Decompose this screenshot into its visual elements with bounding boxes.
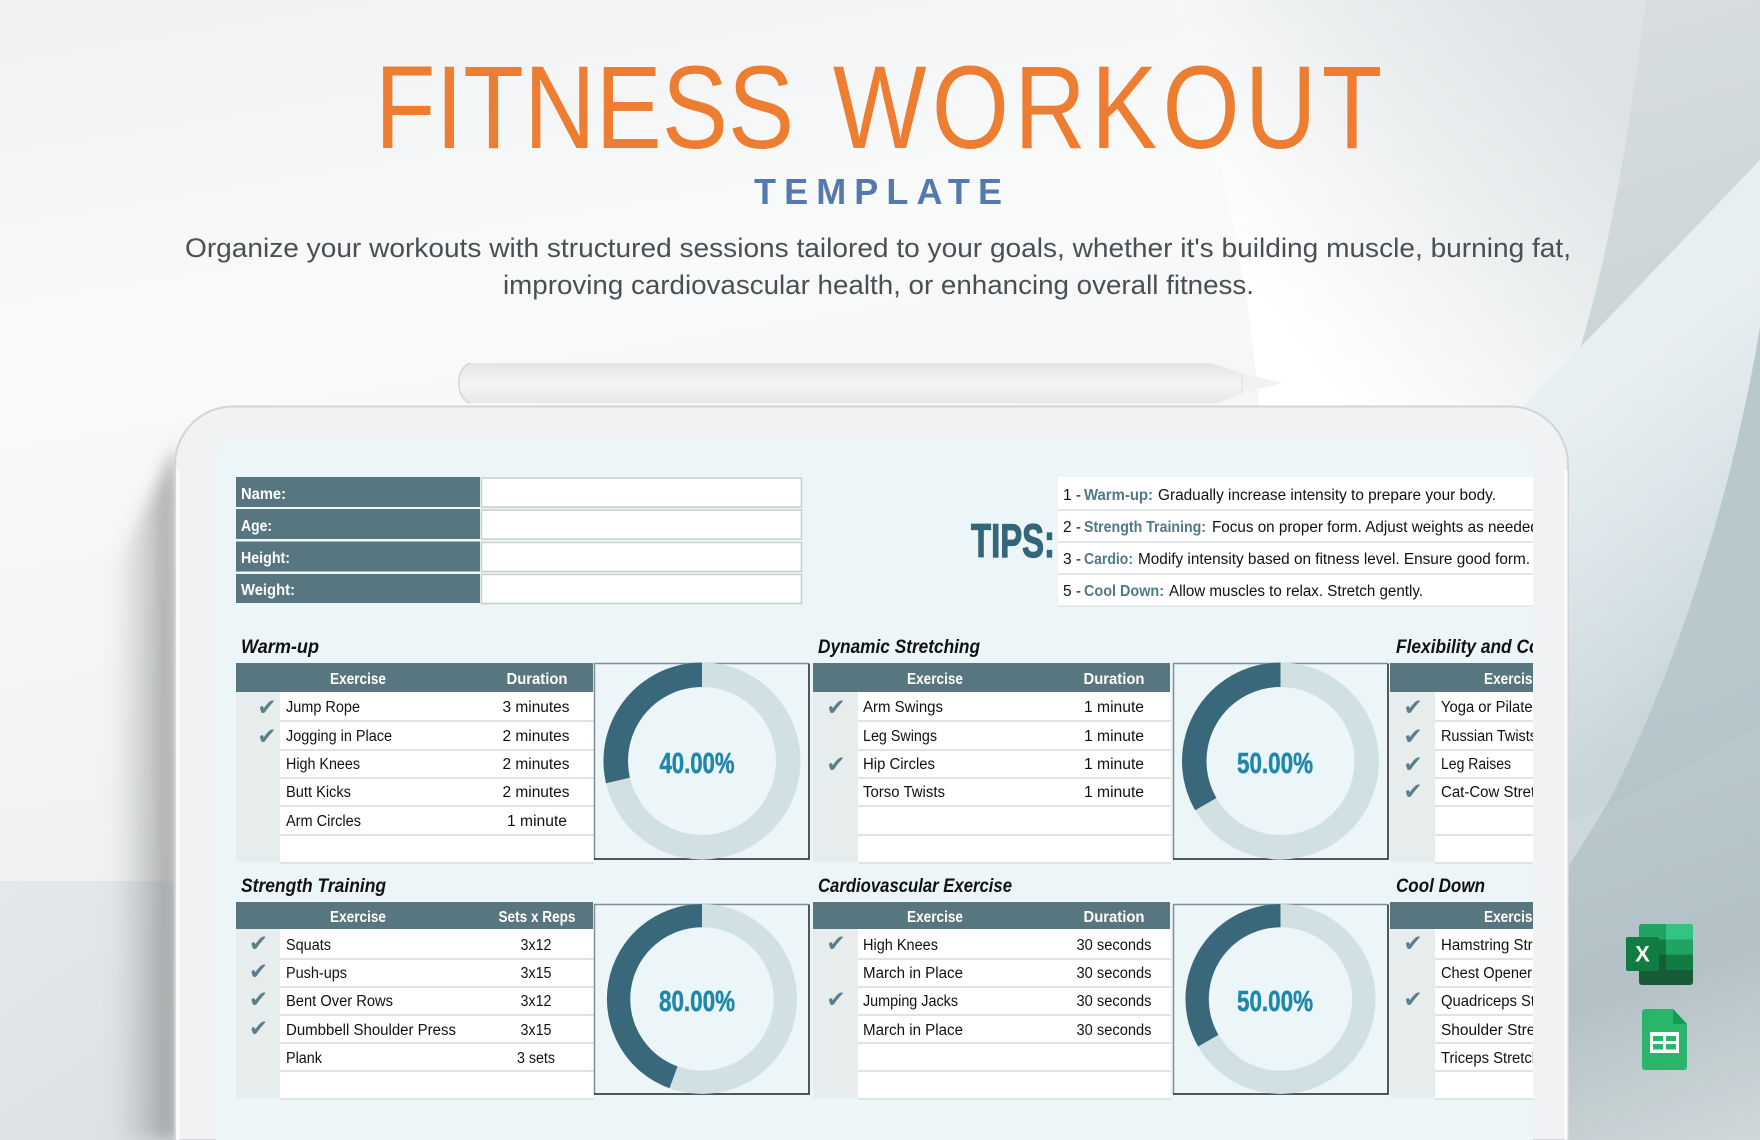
table: ✔ <box>826 987 846 1013</box>
table: Plank <box>286 1050 322 1067</box>
table: Jumping Jacks <box>863 993 958 1010</box>
panel: flexibility and core <box>1390 639 1533 864</box>
tips list: Gradually increase intensity to prepare your body. <box>1158 487 1496 504</box>
tips list: 5 - <box>1063 583 1081 600</box>
tips list: Strength Training: <box>1084 519 1206 536</box>
table: Arm Circles <box>286 813 361 830</box>
table: ✔ <box>249 959 268 985</box>
heading: Flexibility and Core <box>1396 637 1556 658</box>
table: 3x12 <box>520 993 552 1010</box>
table: Duration <box>506 671 568 688</box>
table: Yoga or Pilates <box>1441 699 1540 716</box>
table: 3x15 <box>520 1022 552 1039</box>
table: Exercise <box>330 671 386 688</box>
personal info form <box>236 477 802 604</box>
table: Exercise <box>907 671 963 688</box>
table: 1 minute <box>1084 728 1144 745</box>
table: ✔ <box>1403 695 1423 721</box>
table: 1 minute <box>1084 784 1144 801</box>
table: 1 minute <box>1084 756 1144 773</box>
table: 30 seconds <box>1076 965 1152 982</box>
table: Arm Swings <box>863 699 943 716</box>
table: 3x15 <box>520 965 552 982</box>
donut chart 80%: 80.00% <box>659 986 735 1018</box>
table: ✔ <box>249 1016 268 1042</box>
table: Hip Circles <box>863 756 935 773</box>
heading: Warm-up <box>241 637 319 658</box>
tips heading: TIPS: <box>971 514 1055 567</box>
personal info form: Name: <box>241 486 286 503</box>
table: March in Place <box>863 965 963 982</box>
tips list <box>1058 477 1543 606</box>
table: High Knees <box>863 937 938 954</box>
donut chart 50%: 50.00% <box>1237 748 1313 780</box>
panel: cool down <box>1390 878 1533 1100</box>
table: Duration <box>1084 671 1144 688</box>
title <box>375 42 1382 174</box>
table: 3 sets <box>517 1050 555 1067</box>
stylus pen <box>459 363 1282 403</box>
table: Bent Over Rows <box>286 993 393 1010</box>
table: Exercise <box>907 909 963 926</box>
spreadsheet content <box>236 477 1568 1099</box>
tablet screen <box>216 440 1533 1140</box>
panel: dynamic stretching <box>813 637 1388 863</box>
icon: excel: X <box>1635 942 1650 966</box>
personal info form: Age: <box>241 518 272 535</box>
table: Exercise <box>330 909 386 926</box>
icon: excel <box>1626 924 1693 985</box>
table: Triceps Stretch <box>1441 1050 1540 1067</box>
table: 30 seconds <box>1076 937 1152 954</box>
table: ✔ <box>257 695 277 721</box>
donut chart 50% <box>1173 904 1388 1094</box>
icon: google sheets <box>1642 1009 1687 1070</box>
personal info form: Height: <box>241 550 290 567</box>
title: FITNESS <box>375 42 794 174</box>
table: Leg Swings <box>863 728 937 745</box>
table: ✔ <box>1403 724 1423 750</box>
tips list: 3 - <box>1063 551 1081 568</box>
table: ✔ <box>249 931 268 957</box>
tips list: Cool Down: <box>1084 583 1164 600</box>
tips list: 1 - <box>1063 487 1081 504</box>
subtitle: template: TEMPLATE <box>754 171 1002 212</box>
heading: Strength Training <box>241 876 386 897</box>
tips list: 2 - <box>1063 519 1081 536</box>
table: Chest Opener <box>1441 965 1532 982</box>
tips list: Warm-up: <box>1084 487 1153 504</box>
table: Russian Twists <box>1441 728 1537 745</box>
table: Exercise <box>1484 909 1540 926</box>
table: 2 minutes <box>502 728 570 745</box>
table: Push-ups <box>286 965 347 982</box>
table: ✔ <box>1403 752 1423 778</box>
tips list: Focus on proper form. Adjust weights as needed. <box>1212 519 1543 536</box>
table: Dumbbell Shoulder Press <box>286 1022 456 1039</box>
table: 30 seconds <box>1076 993 1152 1010</box>
table: 30 seconds <box>1076 1022 1152 1039</box>
table: Jogging in Place <box>286 728 392 745</box>
description text <box>185 233 1571 300</box>
donut chart 50% <box>1173 662 1388 859</box>
heading: Dynamic Stretching <box>818 637 980 658</box>
table: 3 minutes <box>502 699 570 716</box>
table: Leg Raises <box>1441 756 1511 773</box>
table: ✔ <box>826 695 846 721</box>
table: Exercise <box>1484 671 1540 688</box>
donut chart 80% <box>594 904 809 1094</box>
table: 2 minutes <box>502 784 570 801</box>
table <box>813 663 1171 863</box>
table <box>236 663 594 863</box>
table: Shoulder Stretch <box>1441 1022 1556 1039</box>
table: Cat-Cow Stretch <box>1441 784 1551 801</box>
table: 3x12 <box>520 937 552 954</box>
table: High Knees <box>286 756 360 773</box>
table: Sets x Reps <box>498 909 576 926</box>
table <box>236 902 594 1099</box>
table: ✔ <box>826 752 846 778</box>
table: ✔ <box>1403 779 1423 805</box>
table: 2 minutes <box>502 756 570 773</box>
table <box>1390 663 1533 864</box>
table: Quadriceps Stretch <box>1441 993 1568 1010</box>
tips list: Allow muscles to relax. Stretch gently. <box>1169 583 1423 600</box>
title: WORKOUT <box>833 42 1382 174</box>
heading: Cool Down <box>1396 876 1485 897</box>
heading: Cardiovascular Exercise <box>818 876 1012 897</box>
table: ✔ <box>1403 931 1423 957</box>
tips list: Modify intensity based on fitness level. Ensure good form. <box>1138 551 1530 568</box>
tablet frame <box>175 406 1568 1140</box>
table: Butt Kicks <box>286 784 351 801</box>
table: Hamstring Stretch <box>1441 937 1561 954</box>
panel: warm-up <box>236 637 809 863</box>
table: Squats <box>286 937 331 954</box>
tips list: Cardio: <box>1084 551 1133 568</box>
table: 1 minute <box>507 813 567 830</box>
table: ✔ <box>249 987 268 1013</box>
description text: improving cardiovascular health, or enhancing overall fitness. <box>503 270 1254 300</box>
donut chart 50%: 50.00% <box>1237 986 1313 1018</box>
table: ✔ <box>826 931 846 957</box>
table: Torso Twists <box>863 784 945 801</box>
table: Duration <box>1084 909 1144 926</box>
table: ✔ <box>257 724 277 750</box>
panel: cardiovascular exercise <box>813 876 1388 1099</box>
tablet shadow <box>112 445 177 1140</box>
table: ✔ <box>1403 987 1423 1013</box>
table <box>1390 902 1533 1100</box>
table: Jump Rope <box>286 699 360 716</box>
donut chart 40% <box>594 662 809 859</box>
personal info form: Weight: <box>241 582 295 599</box>
panel: strength training <box>236 876 809 1099</box>
description text: Organize your workouts with structured sessions tailored to your goals, whether it's building muscle, burning fat, <box>185 233 1571 263</box>
table: 1 minute <box>1084 699 1144 716</box>
table: March in Place <box>863 1022 963 1039</box>
table <box>813 902 1171 1099</box>
donut chart 40%: 40.00% <box>660 748 735 780</box>
